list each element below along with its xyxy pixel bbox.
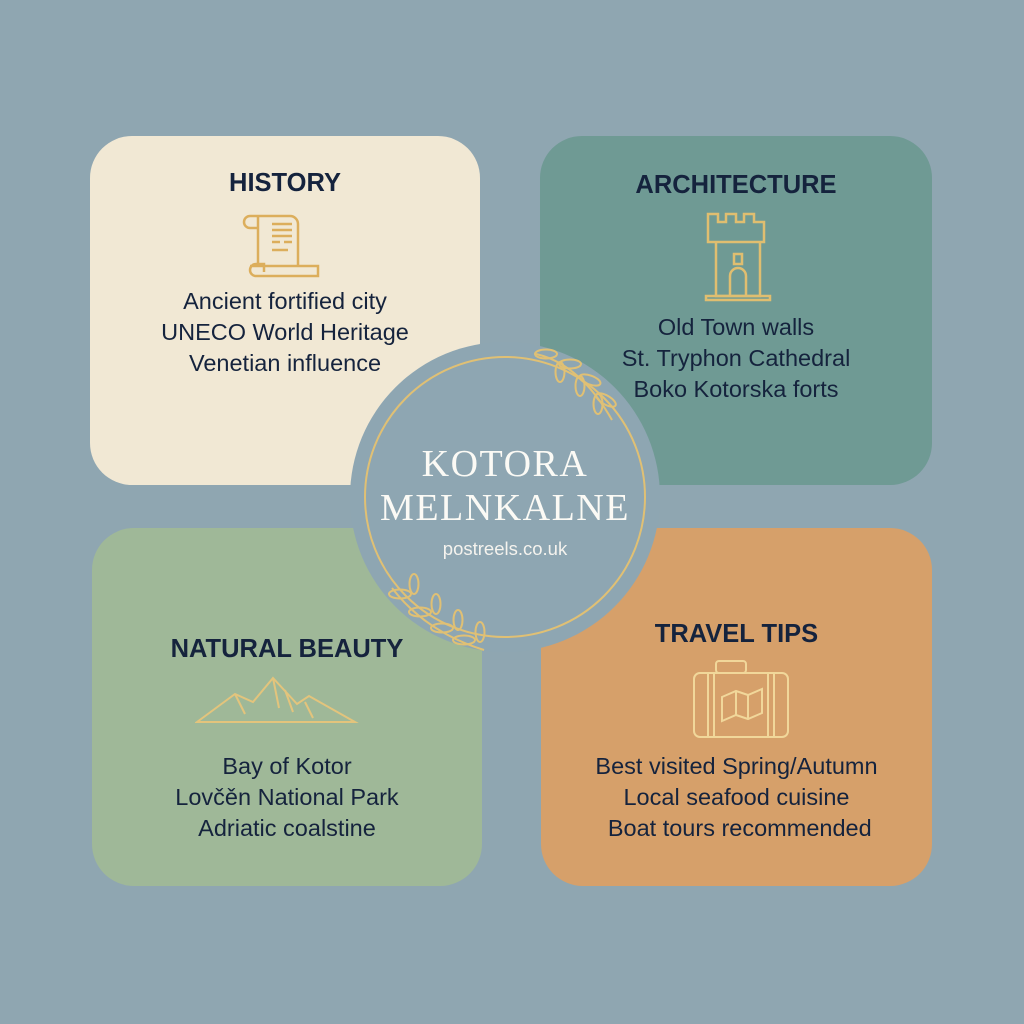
heading: history: HISTORY <box>229 169 341 197</box>
panel: architecture <box>540 136 932 485</box>
title: MELNKALNE <box>380 487 630 529</box>
text: travel items: Boat tours recommended <box>608 815 872 841</box>
heading: travel tips: TRAVEL TIPS <box>655 620 818 648</box>
panel: travel tips <box>541 528 932 886</box>
heading: architecture: ARCHITECTURE <box>635 171 837 199</box>
text: natural items: Bay of Kotor <box>222 753 352 779</box>
text: history items: Venetian influence <box>189 350 381 376</box>
title <box>380 443 630 529</box>
text: history items <box>161 288 409 376</box>
gold ring with laurels <box>364 348 646 651</box>
text: travel items: Best visited Spring/Autumn <box>595 753 878 779</box>
icon: tower <box>704 212 772 302</box>
center badge <box>350 342 660 652</box>
text: history items: Ancient fortified city <box>183 288 387 314</box>
text: architecture items <box>622 314 850 402</box>
website: postreels.co.uk <box>443 538 567 559</box>
text: history items: UNECO World Heritage <box>161 319 409 345</box>
panel: natural beauty <box>92 528 482 886</box>
text: natural items: Lovčěn National Park <box>175 784 399 810</box>
text: natural items <box>175 753 399 841</box>
text: architecture items: St. Tryphon Cathedral <box>622 345 850 371</box>
heading: natural beauty: NATURAL BEAUTY <box>171 635 403 663</box>
text: travel items <box>595 753 878 841</box>
text: travel items: Local seafood cuisine <box>623 784 850 810</box>
text: natural items: Adriatic coalstine <box>198 815 376 841</box>
icon: mountains <box>195 676 358 723</box>
title: KOTORA <box>422 443 588 485</box>
text: architecture items: Boko Kotorska forts <box>633 376 839 402</box>
text: architecture items: Old Town walls <box>658 314 814 340</box>
icon: scroll <box>242 214 320 278</box>
panel: history <box>90 136 480 485</box>
icon: suitcase <box>693 660 789 738</box>
